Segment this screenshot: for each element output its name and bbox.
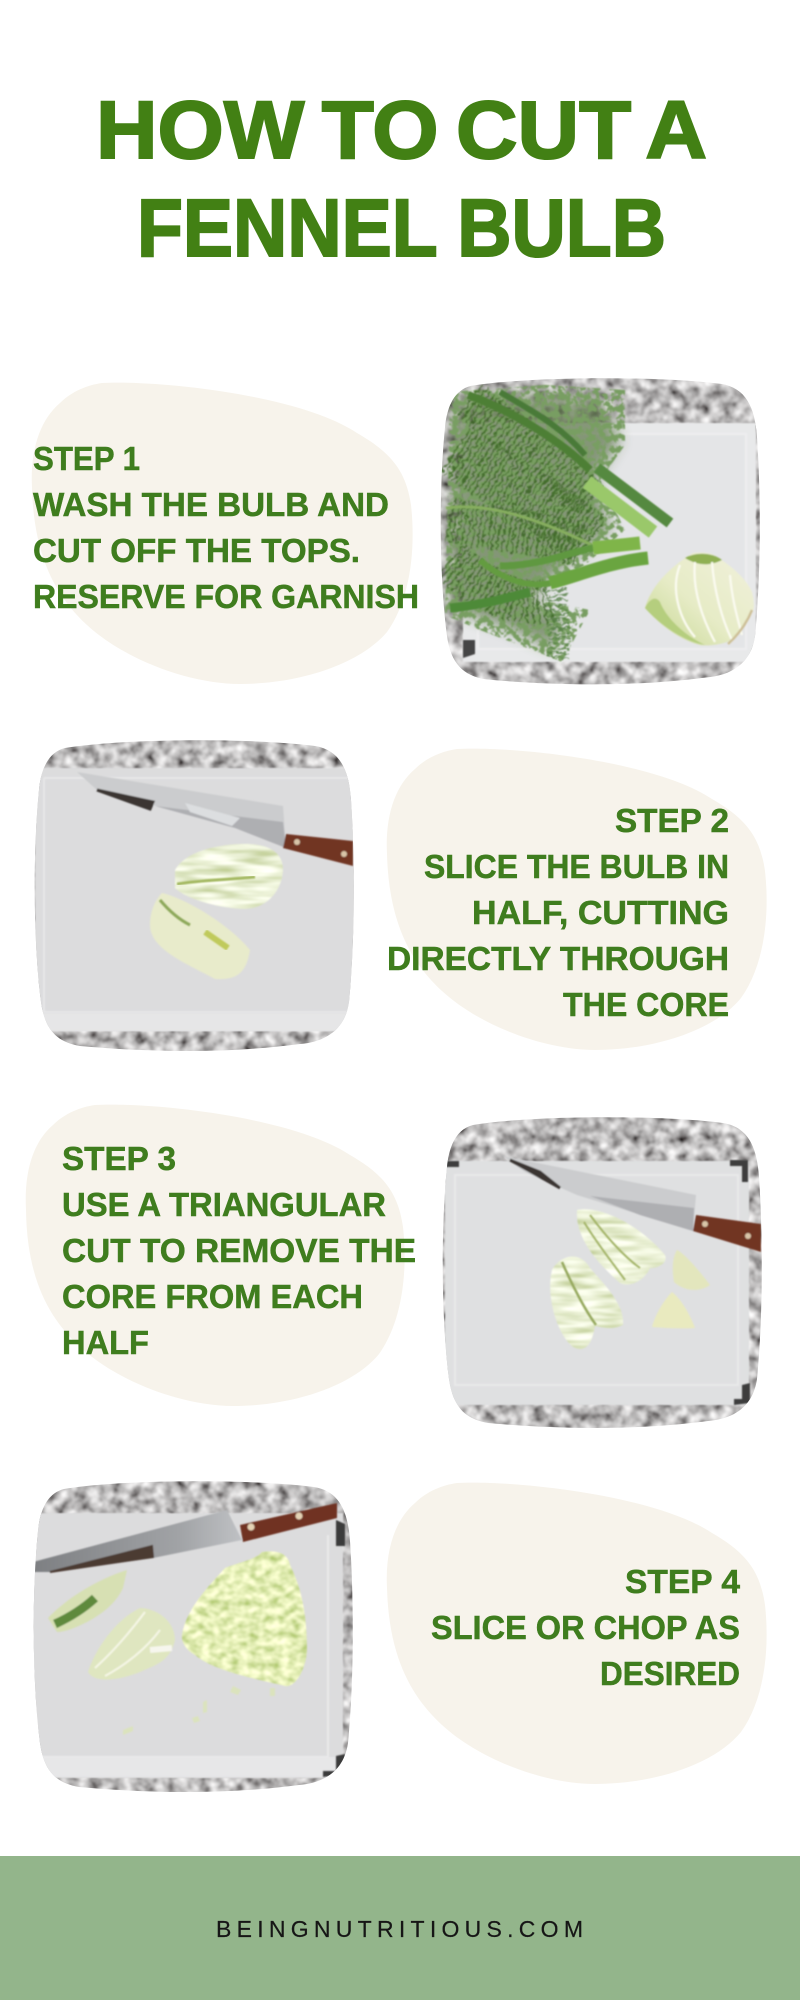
icon: fennel half lower [150,893,250,979]
text: step 2 [387,802,729,1023]
icon: fennel piece lower [550,1256,623,1349]
blob: step 1 background [32,383,413,684]
icon: stray pieces [123,1686,275,1735]
text: step 3 [62,1140,416,1361]
text: step 2: SLICE THE BULB IN [424,848,729,885]
footer band [0,1856,800,2000]
panel: step 2 [30,735,767,1055]
icon: fennel piece upper [577,1209,666,1285]
text: step 4: DESIRED [600,1655,740,1692]
text: step 2: DIRECTLY THROUGH [387,940,729,977]
text: step 1: WASH THE BULB AND [33,486,389,523]
photo: fennel tops and bulb on cutting board [436,372,762,690]
title [96,85,707,274]
text: step 1: RESERVE FOR GARNISH [33,578,419,615]
fennel stalks [446,392,670,608]
text: step 3: CUT TO REMOVE THE [62,1232,416,1269]
photo: core removed from fennel halves [438,1112,768,1432]
icon: sliced fennel [88,1608,175,1680]
footer [0,1856,800,2000]
icon: knife [503,1156,761,1252]
photo: halved fennel bulb and knife on cutting board [30,735,360,1055]
text: step 2: THE CORE [563,986,729,1023]
icon: chopped fennel pile [182,1551,307,1686]
text: step 4: SLICE OR CHOP AS [431,1609,740,1646]
text: step 4 [431,1563,741,1692]
title: FENNEL BULB [137,183,666,274]
photo: chopped fennel and knife on cutting board [29,1476,359,1796]
text: step 1: STEP 1 [33,440,140,477]
icon: small core wedge top [673,1250,710,1290]
panel: step 1 [32,372,762,690]
text: step 3: STEP 3 [62,1140,176,1177]
blob: step 2 background [387,749,767,1050]
text: step 1: CUT OFF THE TOPS. [33,532,360,569]
icon: fennel bulb [645,553,754,645]
text: step 4: STEP 4 [625,1563,741,1600]
blob: step 3 background [26,1105,405,1406]
fennel fronds [445,385,625,662]
text: step 3: HALF [62,1324,149,1361]
panel: step 4 [29,1476,767,1796]
icon: small core wedge bottom [652,1292,695,1328]
text: step 3: USE A TRIANGULAR [62,1186,386,1223]
icon: knife [33,1503,337,1572]
title: HOW TO CUT A [96,85,707,176]
icon: fennel half upper [175,844,283,909]
text: step 2: HALF, CUTTING [472,894,729,931]
text: step 3: CORE FROM EACH [62,1278,363,1315]
text: step 1 [33,440,419,615]
panel: step 3 [26,1105,768,1432]
icon: fennel piece [48,1570,127,1632]
text: step 2: STEP 2 [615,802,729,839]
footer website text: BEINGNUTRITIOUS.COM [216,1916,583,1942]
blob: step 4 background [387,1483,767,1784]
icon: knife [77,772,353,866]
